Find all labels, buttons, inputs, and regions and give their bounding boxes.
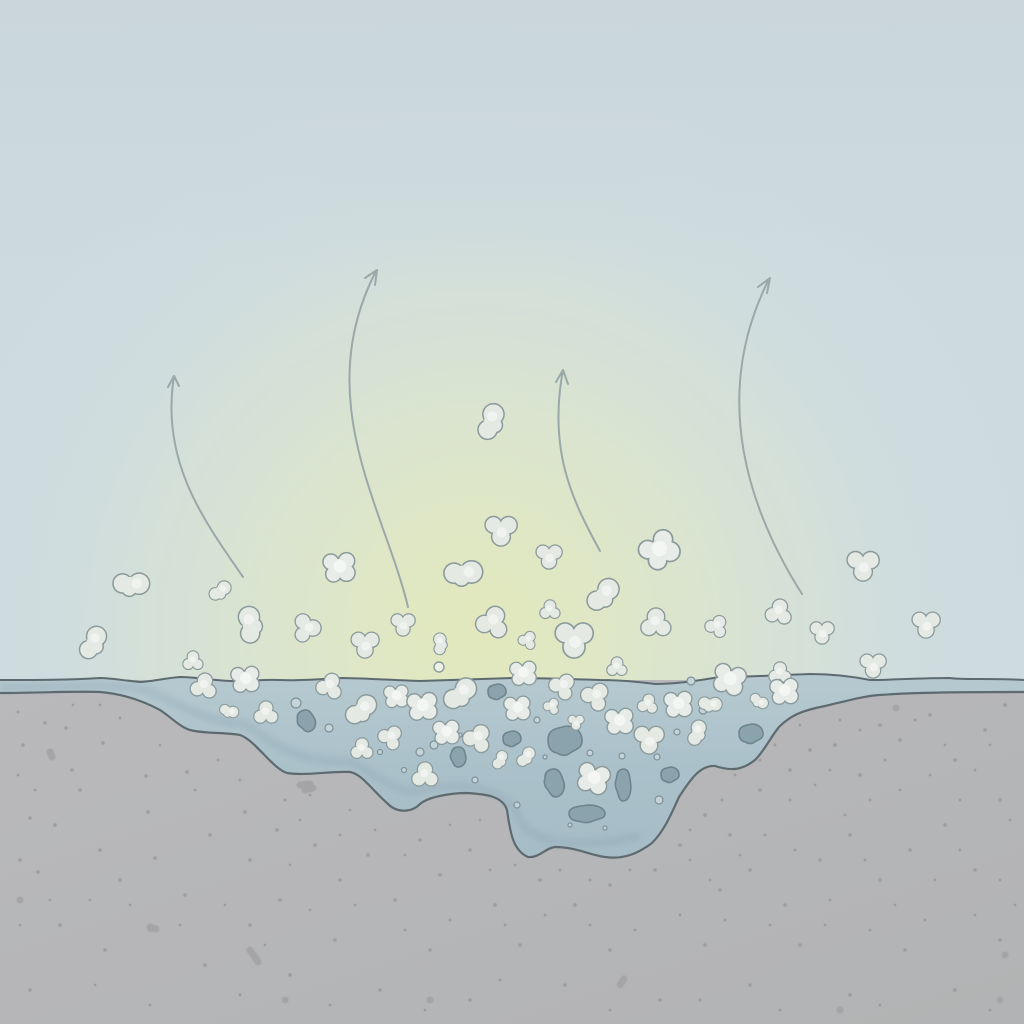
arrow: centre-left rising	[349, 270, 408, 607]
background: sky glow	[0, 0, 1024, 700]
ground: speckled soil	[0, 680, 1024, 1024]
dark submerged blobs	[294, 684, 763, 823]
arrow: far right rising	[739, 278, 802, 594]
bubbles rising through the air	[72, 399, 940, 678]
arrow: centre-right rising	[556, 370, 600, 551]
small specks and rings in the water	[291, 677, 741, 830]
arrow: far left rising	[168, 376, 243, 577]
bubbles in the pool surface	[189, 660, 798, 798]
pool of water on the soil	[0, 674, 1024, 858]
